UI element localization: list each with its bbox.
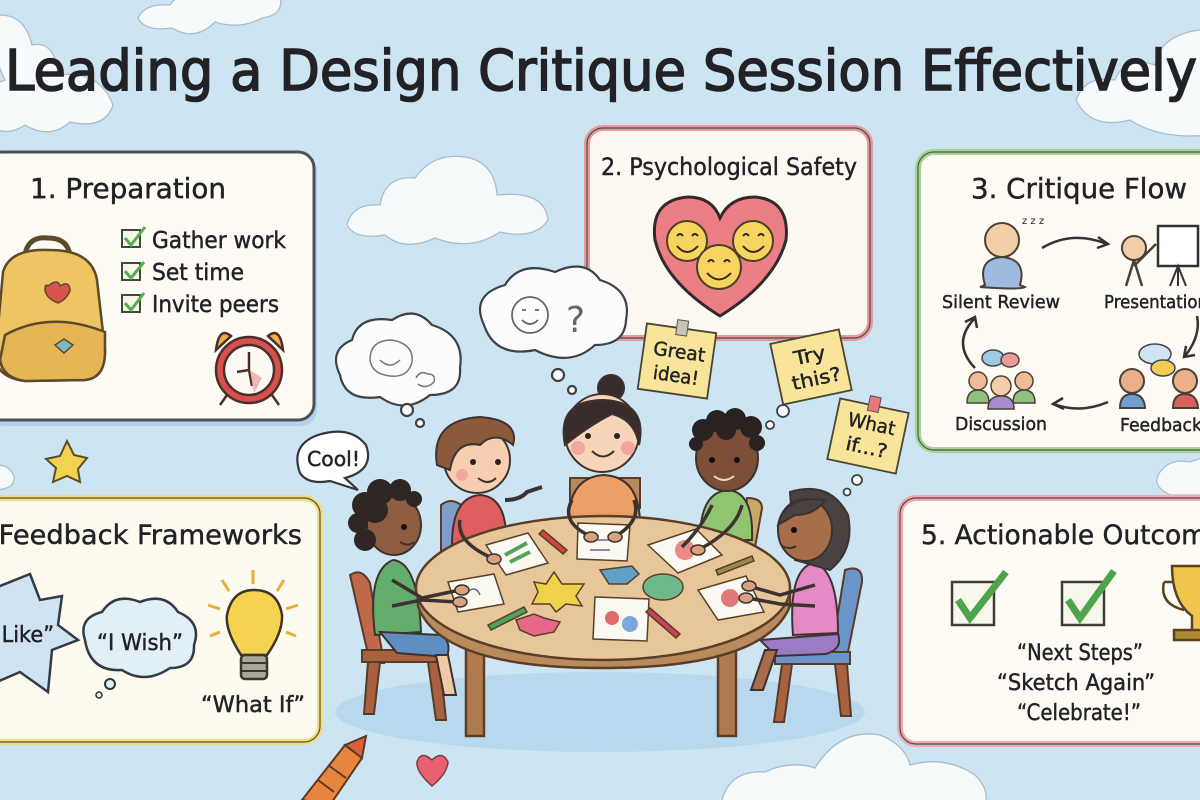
step: silent review: Silent Review [942,292,1060,313]
person: child with dark curly hair [689,408,765,540]
sticky note: what if: if...? [844,433,889,463]
step: silent review [942,216,1060,313]
sticky note: great idea [638,316,717,399]
outcome list [997,641,1155,726]
thought bubble: smile doodle [336,314,461,427]
table items [448,523,764,641]
icon: light bulb [201,570,305,718]
checklist: Invite peers [152,292,279,318]
arrow: to presentation [1042,237,1108,248]
icon: heart with smiling faces [654,197,786,316]
person: child with long hair [751,489,850,690]
thought bubble: smile and question: ? [566,300,585,341]
checklist: Gather work [152,228,287,254]
step: feedback [1120,344,1200,436]
panel: psychological safety [587,128,870,338]
heading: psychological safety: 2. Psychological Safety [601,153,857,181]
heading: preparation: 1. Preparation [30,172,226,205]
sticky note: what if [827,390,911,474]
burst: I like [0,574,78,692]
heading: critique flow: 3. Critique Flow [971,172,1187,205]
person: child with brown hair [436,417,542,545]
outcome list: “Next Steps” [1017,641,1143,666]
sticky note: what if: What [846,409,897,440]
speech bubble: cool: Cool! [307,447,360,471]
panel: actionable outcomes [900,498,1200,744]
icon: checkboxes [952,571,1114,625]
arms and hands on the table [392,500,815,607]
icon: alarm clock [216,333,283,405]
person: child with curly hair [348,479,456,695]
thought bubble: smile and question [480,267,627,394]
icon: backpack [0,238,105,381]
table [416,516,790,736]
arrow: to discussion [1053,398,1108,409]
person: teacher [564,375,641,525]
panel: preparation [0,152,317,426]
panel: feedback frameworks [0,498,320,742]
panel: critique flow [918,152,1200,450]
step: presentation [1104,226,1200,313]
icon: trophy [1163,566,1200,640]
sticky note: great idea: idea! [652,362,700,390]
thought bubble: I wish: “I Wish” [97,631,183,656]
step: discussion [955,350,1047,435]
step: silent review: z z z [1022,216,1044,227]
star [46,441,87,482]
checklist [122,227,287,318]
step: discussion: Discussion [955,414,1047,435]
speech bubble: cool [297,432,368,490]
outcome list: “Celebrate!” [1017,701,1141,726]
floor shadow [335,672,865,752]
icon: light bulb: “What If” [201,693,305,718]
chairs [350,478,862,722]
sticky note: great idea: Great [652,338,707,367]
sticky note: try this [770,329,852,405]
heart [417,755,448,786]
checklist: Set time [152,260,244,286]
thought dots [766,405,862,496]
arrow: to feedback [1184,316,1198,357]
sticky note: try this: Try [791,342,828,370]
crayon [302,736,366,800]
sticky note: try this: this? [790,363,843,395]
arrow: to silent review [963,317,977,368]
thought bubble: I wish [83,599,196,698]
outcome list: “Sketch Again” [997,671,1155,696]
